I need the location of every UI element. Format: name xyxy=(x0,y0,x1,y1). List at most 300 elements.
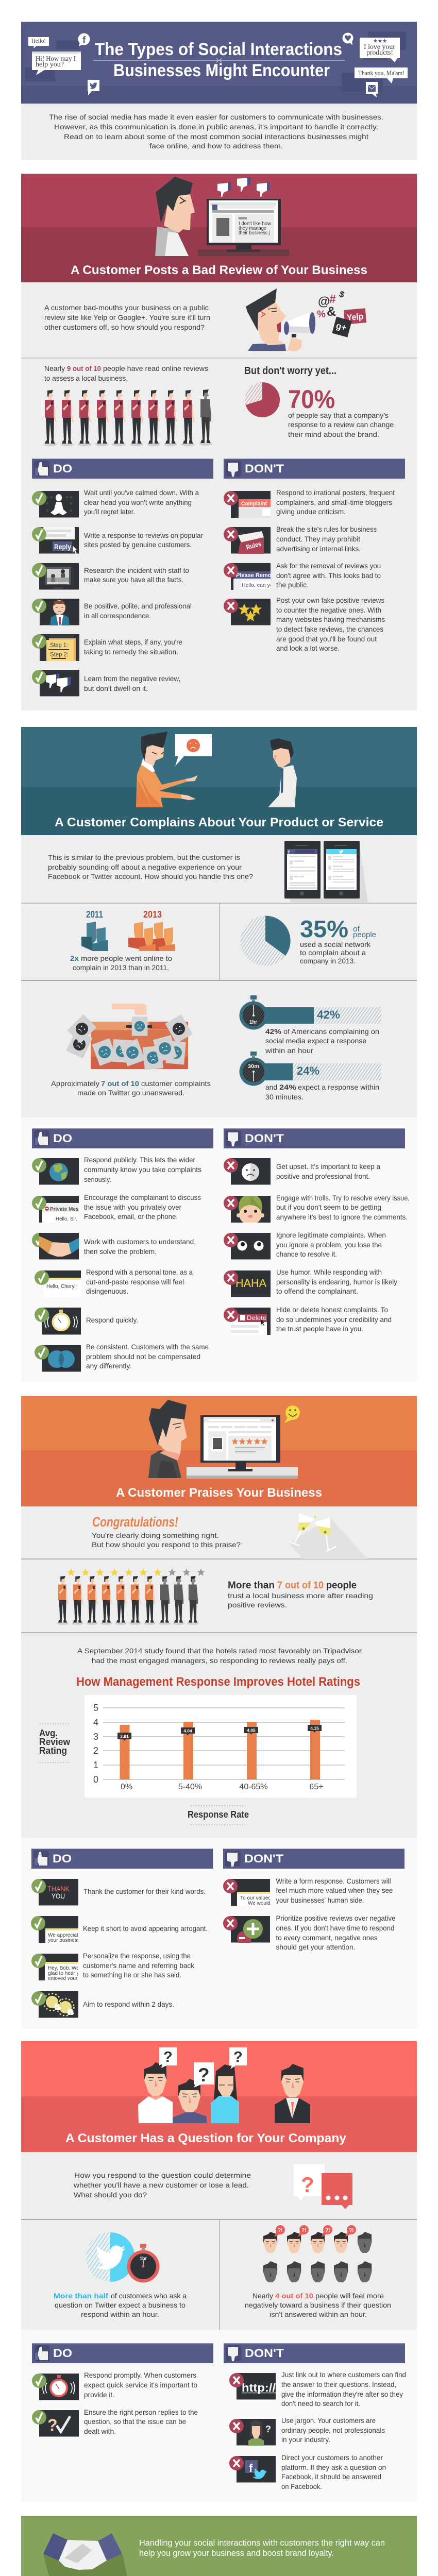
stat: seven out of ten trust: 7 out of 10 xyxy=(277,1580,324,1591)
icon: facebook bubble xyxy=(78,33,90,46)
chart: response within 30 minutes: 24% xyxy=(297,1064,319,1077)
don't item: fake reviews: many websites having mechanisms xyxy=(276,615,385,623)
do item: personalize xyxy=(31,1952,195,1981)
do header xyxy=(32,2343,213,2363)
stat: seven out of ten unanswered: Approximately xyxy=(51,1079,99,1088)
don't header: DON'T xyxy=(244,1852,284,1865)
don't item: prioritize positive: should get your attention. xyxy=(276,1943,356,1951)
chart: response within hour: of Americans complaining on xyxy=(283,1027,379,1036)
don't header xyxy=(224,2343,405,2363)
don't item: fake reviews: and look a lot worse. xyxy=(276,644,340,652)
don't item: prioritize positive xyxy=(223,1914,396,1951)
don't item: ask for removal: Hello, can you xyxy=(242,582,276,588)
pie chart: 70 percent xyxy=(245,382,280,417)
do item: thank the customer: YOU xyxy=(52,1892,65,1900)
do item: thank the customer: Thank the customer for their kind words. xyxy=(83,1887,206,1895)
bar chart: review rating by response rate: 2 xyxy=(93,1745,98,1756)
do item: right person xyxy=(32,2408,198,2437)
don't item: form response: your businesses' human side. xyxy=(276,1896,364,1904)
illustration: woman customer xyxy=(211,2064,239,2123)
don't header xyxy=(223,1849,405,1869)
illustration: smiley bubble xyxy=(284,1405,300,1423)
icon: facebook bubble: f xyxy=(82,35,86,46)
text: congratulations xyxy=(92,1514,241,1549)
icon: question bubble xyxy=(229,2047,247,2069)
don't item: ask for removal: Please Remove xyxy=(236,572,278,579)
illustration: complaint box xyxy=(66,1004,193,1070)
panel: question do and don't xyxy=(21,2330,417,2502)
text: study: A September 2014 study found that the hotels rated most favorably on Tripadvisor xyxy=(77,1647,362,1655)
do item: respond publicly: community know you take complaints xyxy=(84,1165,201,1174)
intro text panel: face online, and how to address them. xyxy=(149,142,283,150)
illustration: toasting glasses xyxy=(289,1513,367,1559)
section title: A Customer Posts a Bad Review of Your Business xyxy=(71,263,367,277)
bar chart: review rating by response rate: 5-40% xyxy=(178,1783,202,1791)
icon: heart bubble xyxy=(342,33,353,45)
don't item: use jargon xyxy=(229,2416,385,2446)
do item: research the incident: Research the incident with staff to xyxy=(84,566,189,574)
do item: discuss privately: the issue with you privately over xyxy=(84,1203,181,1211)
logo: yelp xyxy=(344,308,366,325)
stat: seventy percent xyxy=(244,365,394,438)
don't item: irrational posters xyxy=(224,488,395,518)
intro text panel: The rise of social media has made it even easier for customers to communicate with businesses. xyxy=(49,113,383,121)
closing text: Handling your social interactions with customers the right way can xyxy=(139,2538,385,2548)
pictogram: ten people xyxy=(43,389,212,446)
title divider xyxy=(93,58,345,62)
section banner: question xyxy=(21,2041,417,2152)
do header xyxy=(32,1128,213,1148)
stat: more than half: More than half xyxy=(54,2292,108,2300)
do item: explain steps: Step 1: xyxy=(50,641,68,649)
do item: personal tone: disingenuous. xyxy=(86,1287,128,1295)
panel: praise body xyxy=(21,1506,417,1838)
text: study xyxy=(77,1647,362,1665)
stat: 35 percent: people xyxy=(353,930,376,939)
section banner: praise xyxy=(21,1396,417,1506)
speech bubble: thank you: Thank you, Ma'am! xyxy=(358,70,405,77)
chart: response within hour: 42% xyxy=(317,1008,340,1021)
do item: write a response xyxy=(32,527,203,554)
do item: personal tone xyxy=(35,1268,193,1297)
do item: keep it short: Keep it short to avoid appearing arrogant. xyxy=(83,1924,208,1933)
text: congratulations: But how should you respond to this praise? xyxy=(92,1540,241,1549)
do item: discuss privately xyxy=(32,1193,201,1223)
illustration: man at computer: I don't like how xyxy=(239,221,272,227)
don't item: prioritize positive: Prioritize positive reviews over negative xyxy=(276,1914,396,1922)
do item: keep it short: We appreciate xyxy=(48,1933,81,1938)
do item: respond promptly xyxy=(32,2371,197,2400)
text: congratulations: Congratulations! xyxy=(92,1514,178,1530)
stat: 35 percent: to complain about a xyxy=(300,948,366,957)
don't item: ignore complaints xyxy=(224,1231,386,1260)
pictogram: ten faces: ?! xyxy=(349,2228,353,2233)
don't item: form response: We would l xyxy=(248,1901,273,1906)
bar chart: review rating by response rate: 5 xyxy=(93,1703,98,1713)
do item: personalize: to something he or she has said. xyxy=(83,1971,181,1979)
axis label: response rate xyxy=(188,1806,249,1825)
speech bubble: hello: Hello! xyxy=(31,37,46,44)
do item: respond within two days xyxy=(31,1991,174,2018)
stat: seventy percent: of people say that a company's xyxy=(288,411,389,419)
stat: 35 percent: used a social network xyxy=(300,940,371,948)
don't item: use jargon: Use jargon. Your customers are xyxy=(281,2416,376,2425)
stat: seven out of ten unanswered: customer complaints xyxy=(141,1079,211,1088)
do item: research the incident: make sure you have all the facts. xyxy=(84,575,183,584)
do item: research the incident xyxy=(32,563,189,590)
stat: nine out of ten: to assess a local business. xyxy=(44,374,128,382)
do header: DO xyxy=(53,1132,72,1145)
do item: discuss privately: Encourage the complainant to discuss xyxy=(84,1193,201,1201)
don't item: get upset xyxy=(224,1158,380,1185)
don't item: ask for removal xyxy=(224,562,381,590)
do item: explain steps: Step 2: xyxy=(50,651,69,658)
do item: solve the problem: then solve the problem. xyxy=(84,1247,157,1256)
stat: nine out of ten xyxy=(43,364,212,446)
panel: complaint do and don't xyxy=(21,1117,417,1382)
icon: question bubble xyxy=(159,2047,177,2068)
pictogram: stars xyxy=(67,1568,205,1576)
illustration: twitter and stopwatch: 1hr xyxy=(140,2256,147,2262)
don't item: just link out: Just link out to where customers can find xyxy=(281,2370,406,2379)
speech bubble: love your products: ★★★ xyxy=(373,38,387,44)
stat: more than half xyxy=(54,2292,187,2318)
illustration: two phones xyxy=(284,841,368,903)
closing text: help you grow your business and boost brand loyalty. xyxy=(139,2548,334,2558)
don't item: just link out: the answer to their questions. Instead, xyxy=(281,2380,396,2388)
don't item: another platform: Direct your customers to another xyxy=(281,2453,383,2462)
text: study: had the most engaged managers, so responding to reviews really pays off. xyxy=(92,1656,347,1665)
pictogram: ten people xyxy=(57,1576,199,1625)
intro text xyxy=(48,853,253,880)
closing text xyxy=(139,2538,385,2558)
stat: seven out of ten trust: people xyxy=(326,1580,357,1591)
stat: seven out of ten trust: trust a local business more after reading xyxy=(228,1591,373,1600)
don't item: fake reviews: to counter the negative ones. With xyxy=(276,606,381,614)
do item: respond publicly xyxy=(32,1156,201,1185)
pictogram: two heads xyxy=(81,922,108,951)
do item: learn from review: but don't dwell on it. xyxy=(84,684,148,692)
icon: mail bubble xyxy=(366,82,378,97)
chart: response within hour: within an hour xyxy=(265,1046,313,1055)
section title: A Customer Has a Question for Your Company xyxy=(65,2131,347,2145)
don't item: just link out: don't need to search for it. xyxy=(281,2399,360,2408)
do item: respond promptly: expect quick service it's important to xyxy=(84,2381,197,2389)
do item: explain steps: Explain what steps, if any, you're xyxy=(84,638,182,646)
speech bubble: love your products: I love your xyxy=(364,43,396,50)
intro text panel xyxy=(21,104,417,160)
illustration: boy customer xyxy=(173,2079,207,2123)
do item: calm down xyxy=(32,488,199,518)
chart: response within 30 minutes xyxy=(239,1052,381,1101)
chart: response within 30 minutes: 24% xyxy=(279,1083,297,1091)
stat: seven out of ten trust xyxy=(57,1568,373,1625)
bar chart: review rating by response rate: 4 xyxy=(93,1717,98,1727)
intro text: Facebook or Twitter account. How should you handle this one? xyxy=(48,872,253,880)
don't item: get upset: Get upset. It's important to keep a xyxy=(276,1162,380,1171)
don't item: use humor: to offend the complainant. xyxy=(276,1287,358,1295)
icon: question and answer bubbles: ? xyxy=(301,2173,314,2197)
icon: stopwatch thirty minutes xyxy=(239,1052,268,1086)
closing banner xyxy=(21,2516,417,2576)
icon: question bubble: ? xyxy=(198,2064,210,2086)
do item: personal tone: cut-and-paste response will feel xyxy=(86,1278,184,1286)
illustration: shouting man with megaphone xyxy=(246,289,366,351)
chart: response within hour xyxy=(239,995,381,1055)
logo: yelp: Yelp xyxy=(346,312,364,323)
speech bubble: hello xyxy=(28,37,49,48)
do item: write a response: Reply xyxy=(54,543,71,551)
illustration: man at computer xyxy=(155,177,289,256)
do header: DO xyxy=(53,2347,72,2360)
don't item: another platform: platform. If they ask a question on xyxy=(281,2463,386,2471)
stat: 35 percent: company in 2013. xyxy=(300,957,356,965)
don't item: break rules: conduct. They may prohibit xyxy=(276,535,360,543)
do item: personalize: glad to hear you xyxy=(48,1971,85,1976)
do item: respond promptly: provide it. xyxy=(84,2391,114,2399)
do item: write a response: Write a response to reviews on popular xyxy=(84,531,203,539)
do item: personalize: Personalize the response, using the xyxy=(83,1952,191,1960)
do item: right person: Ensure the right person replies to the xyxy=(84,2408,198,2416)
illustration: twitter and stopwatch xyxy=(86,2232,160,2282)
symbols: grawlix: # xyxy=(329,292,336,306)
pictogram: ten faces: ?! xyxy=(325,2228,330,2233)
intro text xyxy=(44,303,210,331)
title line two: Businesses Might Encounter xyxy=(113,61,330,80)
do item: right person: ? xyxy=(47,2416,58,2434)
intro text: review site like Yelp or Google+. You're sure it'll turn xyxy=(44,313,210,321)
do item: be polite: in all correspondence. xyxy=(84,612,151,620)
do item: calm down: clear head you won't write anything xyxy=(84,498,192,506)
do item: explain steps: taking to remedy the situation. xyxy=(84,648,178,656)
do item: keep it short xyxy=(31,1916,208,1943)
illustration: angry customer xyxy=(136,732,198,807)
stat: more than half: respond within an hour. xyxy=(81,2310,159,2318)
don't item: another platform xyxy=(229,2453,386,2490)
stat: four out of ten: negatively toward a business if their question xyxy=(245,2301,391,2309)
don't item: another platform: Facebook, it should be answered xyxy=(281,2472,381,2481)
bar chart: review rating by response rate: 4.04 xyxy=(183,1728,192,1733)
don't item: use humor: personality is endearing, humor is likely xyxy=(276,1278,397,1286)
panel: complaint body xyxy=(21,835,417,1117)
panel: praise do and don't xyxy=(21,1838,417,2028)
do item: personalize: enjoyed your stay xyxy=(48,1976,88,1981)
don't item: get upset: positive and professional front. xyxy=(276,1172,370,1180)
intro text: How you respond to the question could determine xyxy=(74,2171,251,2179)
don't item: hide complaints: Hide or delete honest complaints. To xyxy=(276,1306,388,1314)
panel: question body xyxy=(21,2152,417,2330)
intro text xyxy=(73,2171,251,2199)
don't item: break rules: Rules xyxy=(245,540,262,551)
intro text: whether you'll have a new customer or lose a lead. xyxy=(73,2181,249,2189)
stat: four out of ten: isn't answered within an hour. xyxy=(269,2310,367,2318)
icon: question bubble: ? xyxy=(233,2049,243,2065)
speech bubble: love your products: products! xyxy=(366,48,393,56)
don't header xyxy=(224,459,405,479)
section banner: complaint xyxy=(21,727,417,835)
icon: thumbs down xyxy=(217,182,231,197)
don't item: irrational posters: Complaint xyxy=(241,501,267,507)
illustration: two phones: f xyxy=(288,850,290,855)
don't item: ask for removal: Ask for the removal of reviews you xyxy=(276,562,381,570)
title line one: The Types of Social Interactions xyxy=(95,40,342,59)
do item: personalize: customer's name and referring back xyxy=(83,1961,195,1970)
stat: nine out of ten: people have read online reviews xyxy=(103,364,208,372)
bar chart: review rating by response rate: 0 xyxy=(93,1774,98,1785)
stat: complaints doubled: complain in 2013 than in 2011. xyxy=(73,963,169,972)
do item: personal tone: Hello, Cheryl| xyxy=(46,1283,77,1290)
do item: be consistent: Be consistent. Customers with the same xyxy=(86,1343,209,1351)
do item: respond publicly: Respond publicly. This lets the wider xyxy=(84,1156,195,1164)
stat: complaints doubled xyxy=(70,909,175,972)
don't item: another platform: on Facebook. xyxy=(281,2482,322,2490)
stat: nine out of ten: 9 out of 10 xyxy=(67,364,101,372)
intro text: What should you do? xyxy=(74,2191,147,2199)
chart: response within 30 minutes: 30 minutes. xyxy=(265,1093,304,1101)
do header xyxy=(32,459,213,479)
stat: complaints doubled: more people went online to xyxy=(81,954,172,962)
chart: response within hour: social media expect a response xyxy=(265,1037,366,1045)
don't item: ignore complaints: you ignore a problem, you lose the xyxy=(276,1241,382,1249)
intro text panel: Read on to learn about some of the most common social interactions businesses might xyxy=(64,132,368,141)
don't item: ask for removal: don't agree with. This looks bad to xyxy=(276,571,381,580)
symbols: grawlix: % xyxy=(317,309,326,320)
bar chart: review rating by response rate: 1 xyxy=(93,1760,98,1770)
don't item: fake reviews: Post your own fake positive reviews xyxy=(276,596,384,604)
speech bubble: thank you xyxy=(355,67,408,83)
panel: bad review body xyxy=(21,282,417,710)
don't item: fake reviews: to detect fake reviews, the chances xyxy=(276,625,383,633)
don't item: ask for removal: the public. xyxy=(276,581,309,589)
do item: respond publicly: seriously. xyxy=(84,1175,111,1183)
do item: be consistent xyxy=(35,1343,209,1372)
do item: solve the problem xyxy=(32,1233,196,1260)
don't item: use humor: Use humor. While responding with xyxy=(276,1268,382,1276)
do item: discuss privately: Facebook, email, or the phone. xyxy=(84,1212,178,1221)
don't item: break rules: Break the site's rules for business xyxy=(276,525,377,533)
stat: seventy percent: But don't worry yet... xyxy=(244,365,336,377)
do item: respond quickly xyxy=(35,1308,138,1335)
text: congratulations: You're clearly doing something right. xyxy=(92,1531,219,1539)
intro text: A customer bad-mouths your business on a public xyxy=(44,303,209,312)
stat: 35 percent: 35% xyxy=(300,916,348,942)
stat: more than half: of customers who ask a xyxy=(111,2292,187,2300)
don't item: hide complaints: Delete xyxy=(247,1314,266,1321)
axis label: response rate: Response Rate xyxy=(188,1809,249,1820)
do header: DO xyxy=(53,462,72,475)
do item: solve the problem: Work with customers to understand, xyxy=(84,1238,196,1246)
symbols: grawlix xyxy=(317,289,346,320)
don't header: DON'T xyxy=(245,2347,284,2360)
illustration: man customer xyxy=(138,2062,173,2123)
bar chart: review rating by response rate: 4.15 xyxy=(310,1726,319,1731)
header banner xyxy=(21,22,417,104)
do item: thank the customer: THANK xyxy=(47,1885,70,1893)
illustration: support agent xyxy=(268,738,297,807)
do item: respond promptly: Respond promptly. When customers xyxy=(84,2371,196,2379)
don't item: irrational posters: complainers, and small-time bloggers xyxy=(276,498,392,506)
don't item: use jargon: in your industry. xyxy=(281,2435,330,2444)
don't item: irrational posters: giving undue criticism. xyxy=(276,507,346,516)
stat: 35 percent xyxy=(240,916,376,965)
axis label: rating: Rating xyxy=(39,1745,67,1756)
don't item: just link out xyxy=(229,2370,406,2408)
chart: response within 30 minutes: expect a response within xyxy=(298,1083,379,1091)
illustration: handshake xyxy=(43,2533,128,2576)
don't item: form response: Write a form response. Customers will xyxy=(276,1877,391,1885)
do item: thank the customer xyxy=(31,1879,206,1906)
don't item: fake reviews xyxy=(224,596,385,652)
bar chart: review rating by response rate: 3 xyxy=(93,1732,98,1742)
don't item: hide complaints: the trust people have in you. xyxy=(276,1325,363,1333)
intro text panel: However, as this communication is done in public arenas, it's important to handle it correctly. xyxy=(54,123,378,131)
illustration: businessman xyxy=(275,2064,310,2123)
axis label: rating: Avg. xyxy=(39,1728,58,1738)
don't item: use jargon: ? xyxy=(265,2424,271,2434)
bar chart: review rating by response rate xyxy=(85,1695,357,1798)
don't item: use humor: HAHA xyxy=(235,1277,266,1290)
do item: keep it short: your business. xyxy=(48,1938,81,1943)
pie chart: 35 percent xyxy=(240,916,291,965)
do item: be polite: Be positive, polite, and professional xyxy=(84,602,192,610)
stat: 35 percent: of xyxy=(353,925,360,934)
don't item: hide complaints: do so undermines your credibility and xyxy=(276,1315,392,1324)
bar chart: review rating by response rate: 40-65% xyxy=(239,1783,268,1791)
icon: twitter bubble xyxy=(88,80,99,95)
bar chart: review rating by response rate: 3.81 xyxy=(120,1734,129,1739)
stat: four out of ten xyxy=(245,2292,391,2318)
chart heading: How Management Response Improves Hotel Ratings xyxy=(76,1675,360,1689)
don't header: DON'T xyxy=(245,1132,284,1145)
stat: seven out of ten unanswered xyxy=(51,1079,211,1097)
don't item: break rules: advertising or internal links. xyxy=(276,545,361,553)
don't item: engage with trolls: anywhere it's best to ignore the comments. xyxy=(276,1213,408,1221)
don't item: prioritize positive: ones. If you don't have time to respond xyxy=(276,1924,395,1932)
bar chart: review rating by response rate: 0% xyxy=(121,1783,132,1791)
do item: learn from review: Learn from the negative review, xyxy=(84,674,180,683)
icon: stopwatch thirty minutes: 30m xyxy=(248,1064,259,1070)
stat: seven out of ten unanswered: 7 out of 10 xyxy=(101,1079,139,1088)
stat: complaints doubled: 2x xyxy=(70,954,79,962)
section banner: bad review xyxy=(21,174,417,282)
logo: google plus xyxy=(332,317,352,337)
do item: be polite xyxy=(32,599,192,625)
icon: question bubble xyxy=(194,2062,214,2088)
do header xyxy=(31,1849,213,1869)
do item: personal tone: Respond with a personal tone, as a xyxy=(86,1268,193,1276)
do item: be consistent: any differently. xyxy=(86,1362,131,1370)
do item: right person: question, so that the issue can be xyxy=(84,2417,186,2426)
section title: A Customer Complains About Your Product or Service xyxy=(55,816,383,829)
section title: A Customer Praises Your Business xyxy=(116,1486,322,1500)
don't item: use humor xyxy=(224,1268,397,1297)
illustration: man at computer xyxy=(148,1400,298,1479)
stat: four out of ten: people will feel more xyxy=(315,2292,384,2300)
do item: explain steps xyxy=(32,634,182,661)
axis label: rating xyxy=(39,1724,71,1762)
chart: response within hour: 42% xyxy=(265,1027,282,1036)
do item: calm down: you'll regret later. xyxy=(84,507,135,516)
stat: four out of ten: Nearly xyxy=(252,2292,273,2300)
stat: complaints doubled: 2013 xyxy=(143,909,162,920)
stat: nine out of ten: Nearly xyxy=(44,364,65,372)
do item: discuss privately: Hello, Sir. xyxy=(56,1216,77,1222)
intro text: probably sounding off about a negative experience on your xyxy=(48,863,242,871)
stat: seven out of ten unanswered: made on Twitter go unanswered. xyxy=(77,1089,184,1097)
do item: calm down: Wait until you've calmed down. With a xyxy=(84,488,199,497)
intro text: This is similar to the previous problem, but the customer is xyxy=(48,853,240,861)
speech bubble: how may I help: Hi! How may I xyxy=(36,55,76,63)
